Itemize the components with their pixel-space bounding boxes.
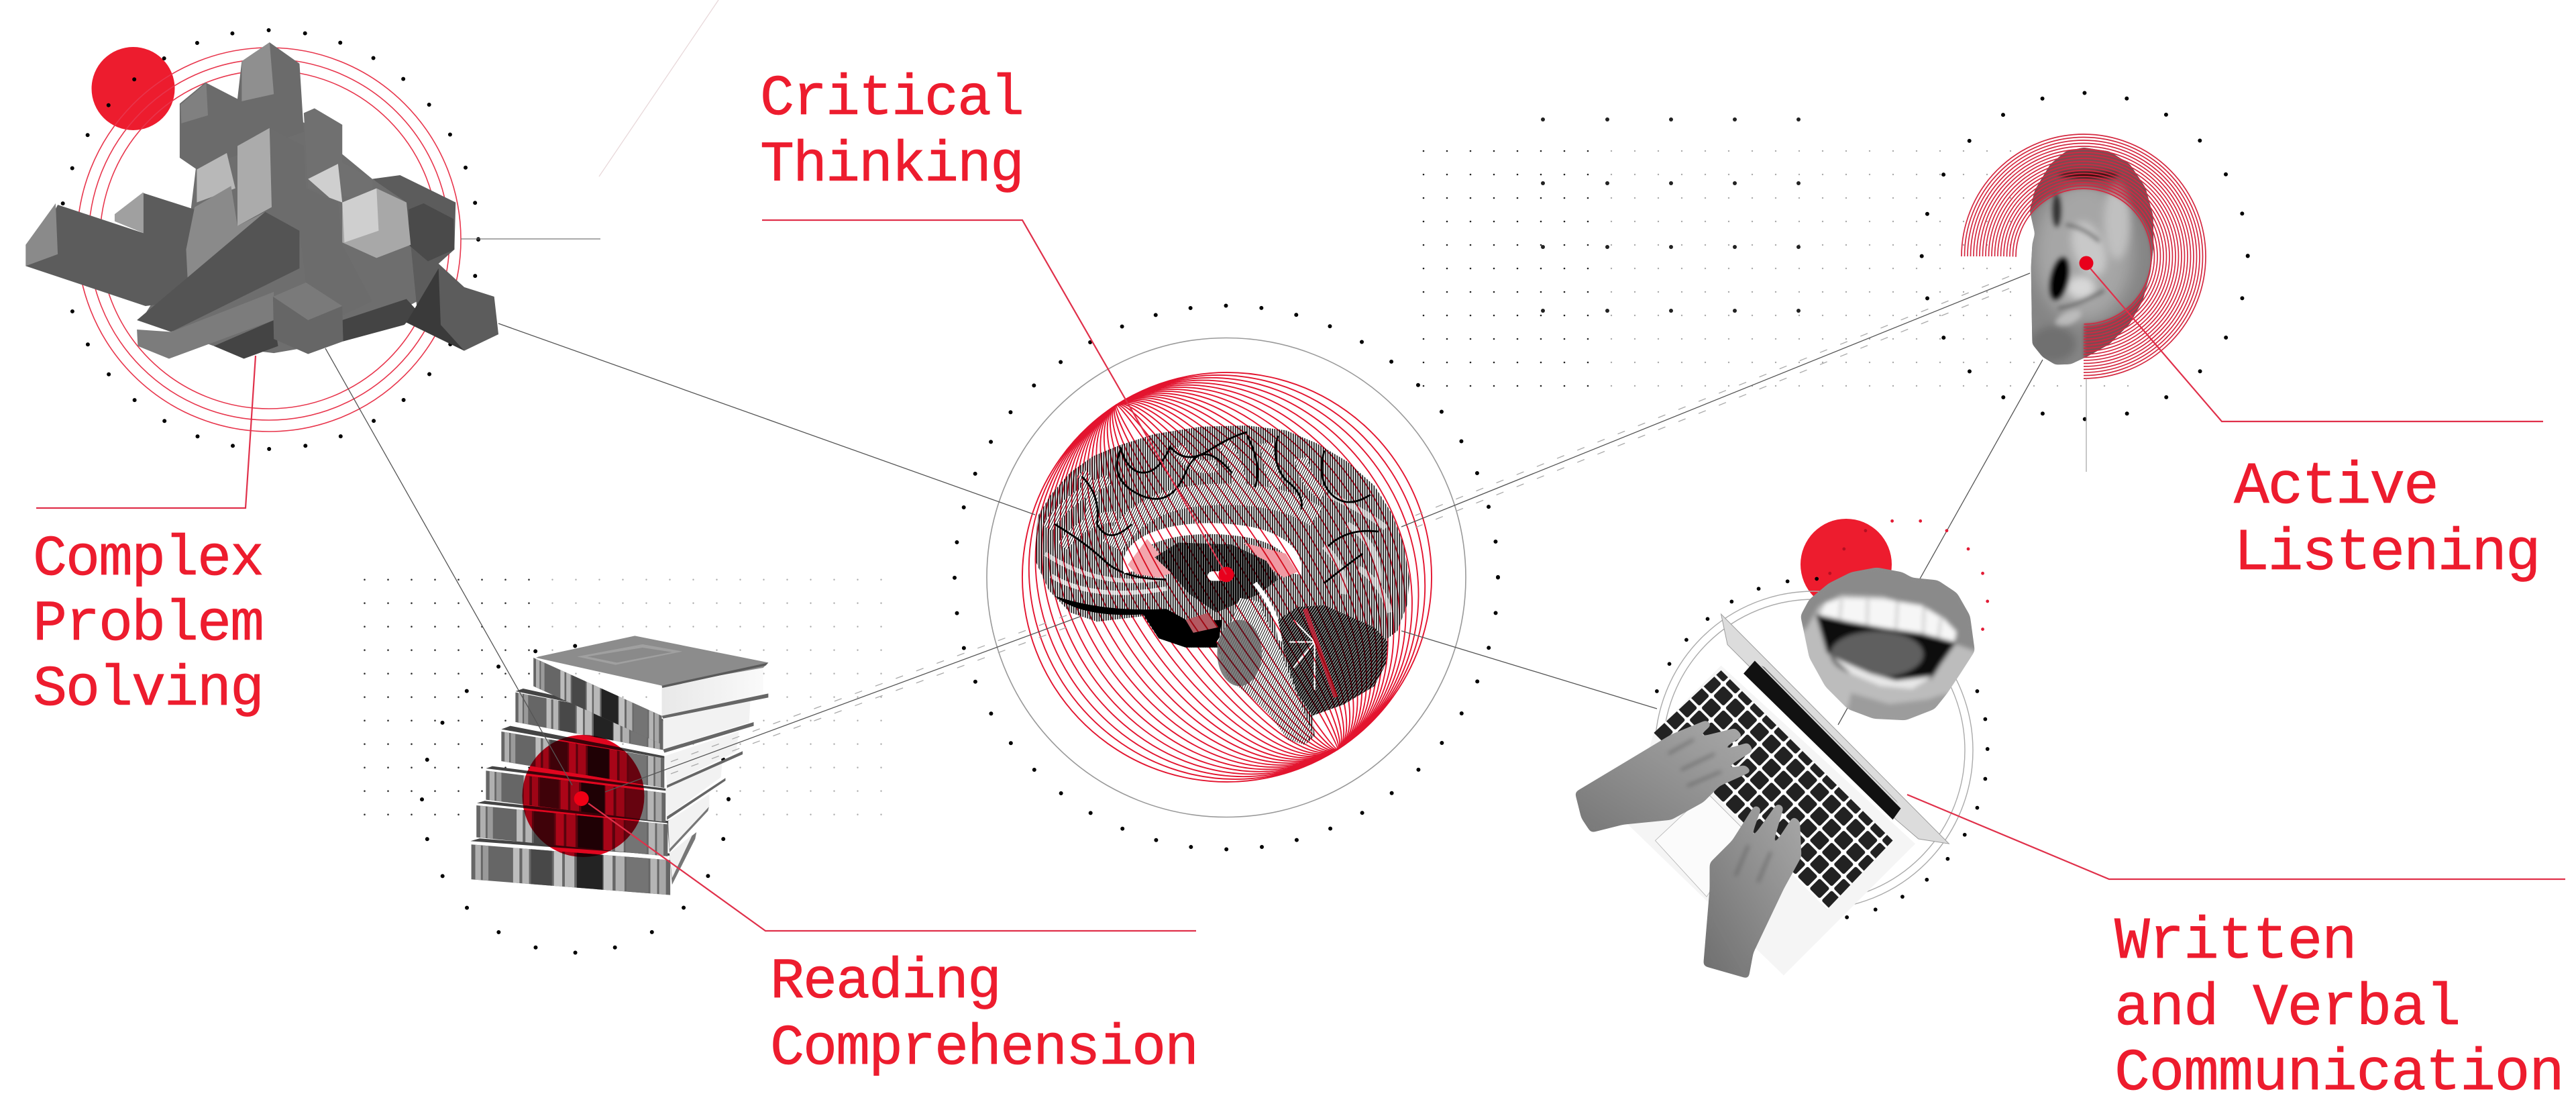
red ellipse line family [945, 295, 1509, 860]
label: critical thinking: Thinking [760, 133, 1023, 198]
connector: brain to ear [1401, 273, 2030, 527]
icon: stack of books [470, 636, 768, 895]
grey ring [987, 338, 1466, 817]
brainstem [1216, 598, 1313, 745]
dot ring [955, 306, 1498, 850]
panel: complex problem solving puzzle [25, 30, 498, 449]
label: critical thinking: Critical [760, 66, 1023, 132]
red dots [1828, 519, 1989, 631]
dashes: ear side [1415, 272, 2021, 528]
leader lines [36, 220, 2565, 931]
connector to laptop [1838, 360, 2043, 725]
large dot matrix [1541, 117, 1801, 313]
panel: brain [945, 295, 1509, 860]
leader: reading comprehension [588, 803, 1196, 931]
label: active listening: Active [2234, 454, 2438, 521]
red translucent disc [522, 735, 644, 857]
connector: ear vertical [2086, 379, 2087, 472]
cerebellum [1278, 605, 1388, 715]
label: reading comprehension: Reading [770, 950, 1000, 1015]
icon: ear [2030, 148, 2153, 365]
dashes: books side [671, 614, 1070, 774]
red disc [1801, 519, 1892, 610]
corpus callosum [1129, 529, 1296, 574]
red point [2080, 256, 2093, 270]
red point [1218, 566, 1234, 583]
icon: laptop [1628, 614, 1949, 975]
black dots [1655, 577, 1990, 919]
panel: reading comprehension books [422, 636, 768, 953]
dot ring [422, 646, 729, 953]
connector lines [325, 0, 2086, 792]
label: reading comprehension: Comprehension [770, 1016, 1197, 1081]
panel: written and verbal communication [1575, 360, 2043, 978]
connector: brain to laptop [1401, 631, 1657, 709]
icon: wooden puzzle [25, 42, 498, 359]
dot grid: behind books [353, 568, 893, 826]
dot ring [1922, 93, 2248, 419]
leader: complex problem solving [36, 356, 256, 508]
label: complex problem solving: Solving [33, 657, 263, 722]
red arc rings [1962, 134, 2206, 379]
label: written and verbal communication: and Verbal [2114, 976, 2460, 1042]
connector: puzzle to books [325, 348, 572, 785]
dot grid: behind ear [1411, 140, 2140, 397]
connector: puzzle to brain [498, 323, 1035, 515]
leader: active listening [2090, 268, 2543, 421]
label: complex problem solving: Problem [33, 592, 263, 657]
connector: puzzle to side [461, 238, 600, 240]
leader: written and verbal communication [1907, 795, 2565, 879]
label: written and verbal communication: Written [2114, 909, 2357, 976]
icon: typing hands [1575, 720, 1801, 978]
label: active listening: Listening [2234, 521, 2539, 587]
icon: brain engraving [1036, 425, 1409, 745]
icon: open mouth [1801, 568, 1975, 720]
red disc [91, 47, 174, 130]
leader: critical thinking [762, 220, 1226, 574]
dot ring [60, 30, 478, 449]
panel: active listening ear [1922, 93, 2248, 419]
grey rings [1655, 591, 1973, 909]
red point [574, 791, 589, 806]
label: complex problem solving: Complex [33, 527, 263, 592]
connector: faint diagonal [599, 0, 718, 177]
red rings [77, 48, 461, 432]
connector: brain to books [605, 616, 1081, 792]
